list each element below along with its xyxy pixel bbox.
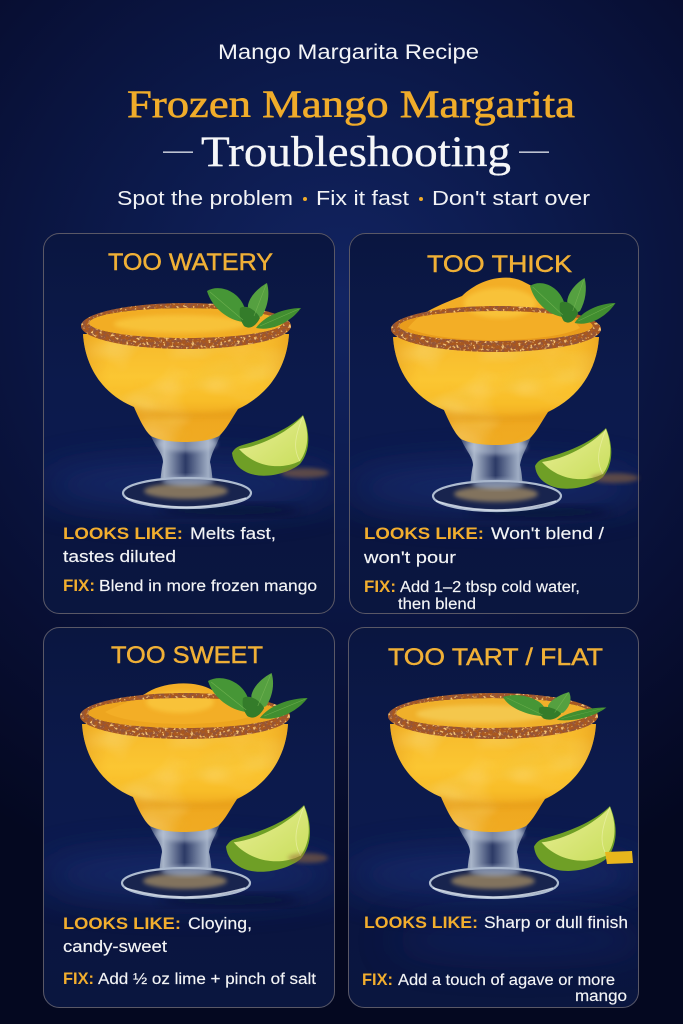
icon: mint <box>207 283 301 329</box>
text: looks like: Melts fast, <box>190 525 276 543</box>
heading: TOO SWEET <box>111 642 263 669</box>
text: fix <box>362 971 627 1005</box>
spice crumbs <box>288 853 328 863</box>
icon: mint <box>530 278 616 324</box>
text: looks like: Won't blend / <box>491 525 604 543</box>
icon: margarita glass, flat top <box>387 693 599 898</box>
subtitle: troubleshooting with rules: Troubleshooting <box>201 129 511 176</box>
icon: margarita glass, watery <box>80 303 292 508</box>
text: fix: Add 1–2 tbsp cold water, <box>400 579 580 596</box>
icon: lime wedge <box>535 428 611 489</box>
heading: TOO TART / FLAT <box>388 644 603 671</box>
text: fix: FIX: <box>63 970 94 988</box>
icon: lime wedge <box>226 805 310 872</box>
text: fix: FIX: <box>362 971 393 989</box>
heading: TOO THICK <box>427 251 572 278</box>
text: fix <box>364 578 580 613</box>
tagline: Fix it fast <box>316 188 410 210</box>
panel: too thick <box>345 233 645 614</box>
icon: margarita glass, thick mound <box>390 278 602 511</box>
text: fix: FIX: <box>364 578 396 596</box>
spice crumbs <box>591 473 639 483</box>
spice crumbs <box>281 468 329 478</box>
text: fix: Blend in more frozen mango <box>99 578 317 595</box>
text: looks like <box>63 525 276 566</box>
header <box>117 41 590 210</box>
text: fix: FIX: <box>63 577 95 595</box>
text: looks like: candy-sweet <box>63 938 167 956</box>
kicker: recipe name: Mango Margarita Recipe <box>218 41 479 64</box>
tagline <box>117 188 590 210</box>
text: looks like: LOOKS LIKE: <box>364 525 484 543</box>
panel: too sweet <box>40 627 340 1008</box>
text: looks like <box>364 914 628 932</box>
tagline: Don't start over <box>432 188 590 210</box>
title: Frozen Mango Margarita <box>127 83 575 126</box>
icon: mint <box>208 673 308 719</box>
text: looks like: won't pour <box>363 549 457 567</box>
icon: lime wedge <box>232 415 308 476</box>
icon: lime wedge <box>534 806 616 871</box>
text: looks like: LOOKS LIKE: <box>63 915 181 933</box>
icon: margarita glass, sweet mound <box>79 683 291 898</box>
text: looks like: tastes diluted <box>63 548 176 566</box>
panel: too watery <box>40 233 340 614</box>
text: looks like <box>363 525 604 567</box>
icon: mango cube <box>605 851 633 864</box>
text: looks like: LOOKS LIKE: <box>63 525 183 543</box>
heading: TOO WATERY <box>108 249 273 276</box>
text: looks like <box>63 915 252 956</box>
icon: mint <box>503 692 606 720</box>
text: fix: Add a touch of agave or more <box>398 972 615 989</box>
tagline: Spot the problem <box>117 188 293 210</box>
text: looks like: LOOKS LIKE: <box>364 914 478 932</box>
panel: too tart or flat <box>345 627 650 1008</box>
text: looks like: Cloying, <box>188 915 252 933</box>
text: fix: mango <box>575 988 627 1005</box>
text: looks like: Sharp or dull finish <box>484 914 628 932</box>
text: fix: Add ½ oz lime + pinch of salt <box>98 971 317 988</box>
text: fix: then blend <box>398 596 476 613</box>
